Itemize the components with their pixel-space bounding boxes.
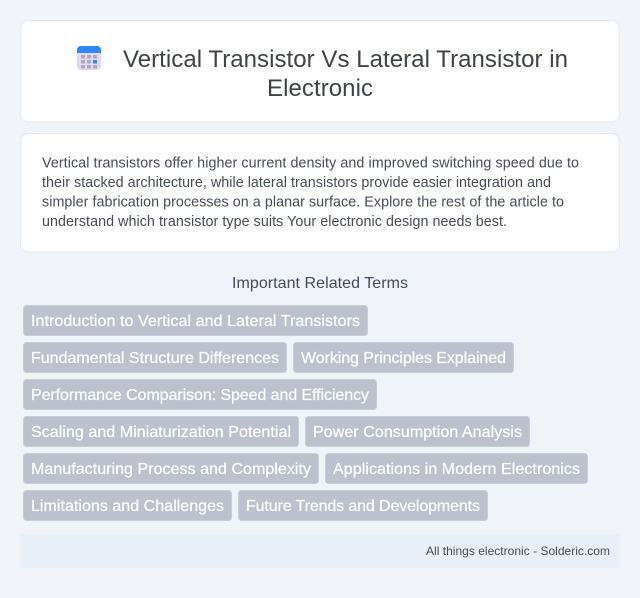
- panel: title card: [20, 20, 620, 122]
- chip: limitations: [24, 490, 232, 520]
- panel: summary card: [20, 134, 620, 252]
- title: [123, 46, 568, 102]
- chip: fundamental structure: [24, 342, 286, 372]
- panel: summary card: simpler fabrication processes on a planar surface. Explore the rest of the article to: [42, 194, 564, 210]
- chip: performance comparison: Performance Comparison: Speed and Efficiency: [31, 387, 369, 404]
- chip: future trends: [238, 490, 488, 520]
- chip: working principles: Working Principles Explained: [301, 350, 506, 367]
- chip: fundamental structure: Fundamental Structure Differences: [31, 350, 279, 367]
- chip: scaling: Scaling and Miniaturization Potential: [31, 424, 291, 441]
- panel: summary card: understand which transistor type suits Your electronic design needs best.: [42, 214, 507, 230]
- chip: introduction: Introduction to Vertical and Lateral Transistors: [31, 313, 360, 330]
- title: Electronic: [267, 75, 373, 102]
- chip: limitations: Limitations and Challenges: [31, 498, 224, 515]
- chip: performance comparison: [24, 380, 376, 410]
- footer: [20, 534, 620, 568]
- panel: summary card: their stacked architecture, while lateral transistors provide easier integration and: [42, 175, 551, 191]
- panel: related term chips: [24, 306, 588, 520]
- chip: manufacturing: Manufacturing Process and Complexity: [31, 461, 311, 478]
- chip: manufacturing: [24, 454, 318, 484]
- footer: All things electronic - Solderic.com: [426, 544, 610, 558]
- chip: applications: Applications in Modern Electronics: [333, 461, 580, 478]
- title: Vertical Transistor Vs Lateral Transistor in: [123, 46, 568, 73]
- panel: summary card: Vertical transistors offer higher current density and improved switching speed due to: [42, 156, 579, 172]
- icon: calendar grid: [77, 46, 101, 70]
- chip: working principles: [294, 342, 514, 372]
- heading: important related terms: Important Related Terms: [232, 275, 408, 292]
- chip: introduction: [24, 306, 368, 336]
- chip: applications: [326, 454, 588, 484]
- chip: power consumption: [306, 416, 530, 446]
- chip: future trends: Future Trends and Developments: [246, 498, 480, 515]
- chip: power consumption: Power Consumption Analysis: [313, 424, 522, 441]
- chip: scaling: [24, 416, 298, 446]
